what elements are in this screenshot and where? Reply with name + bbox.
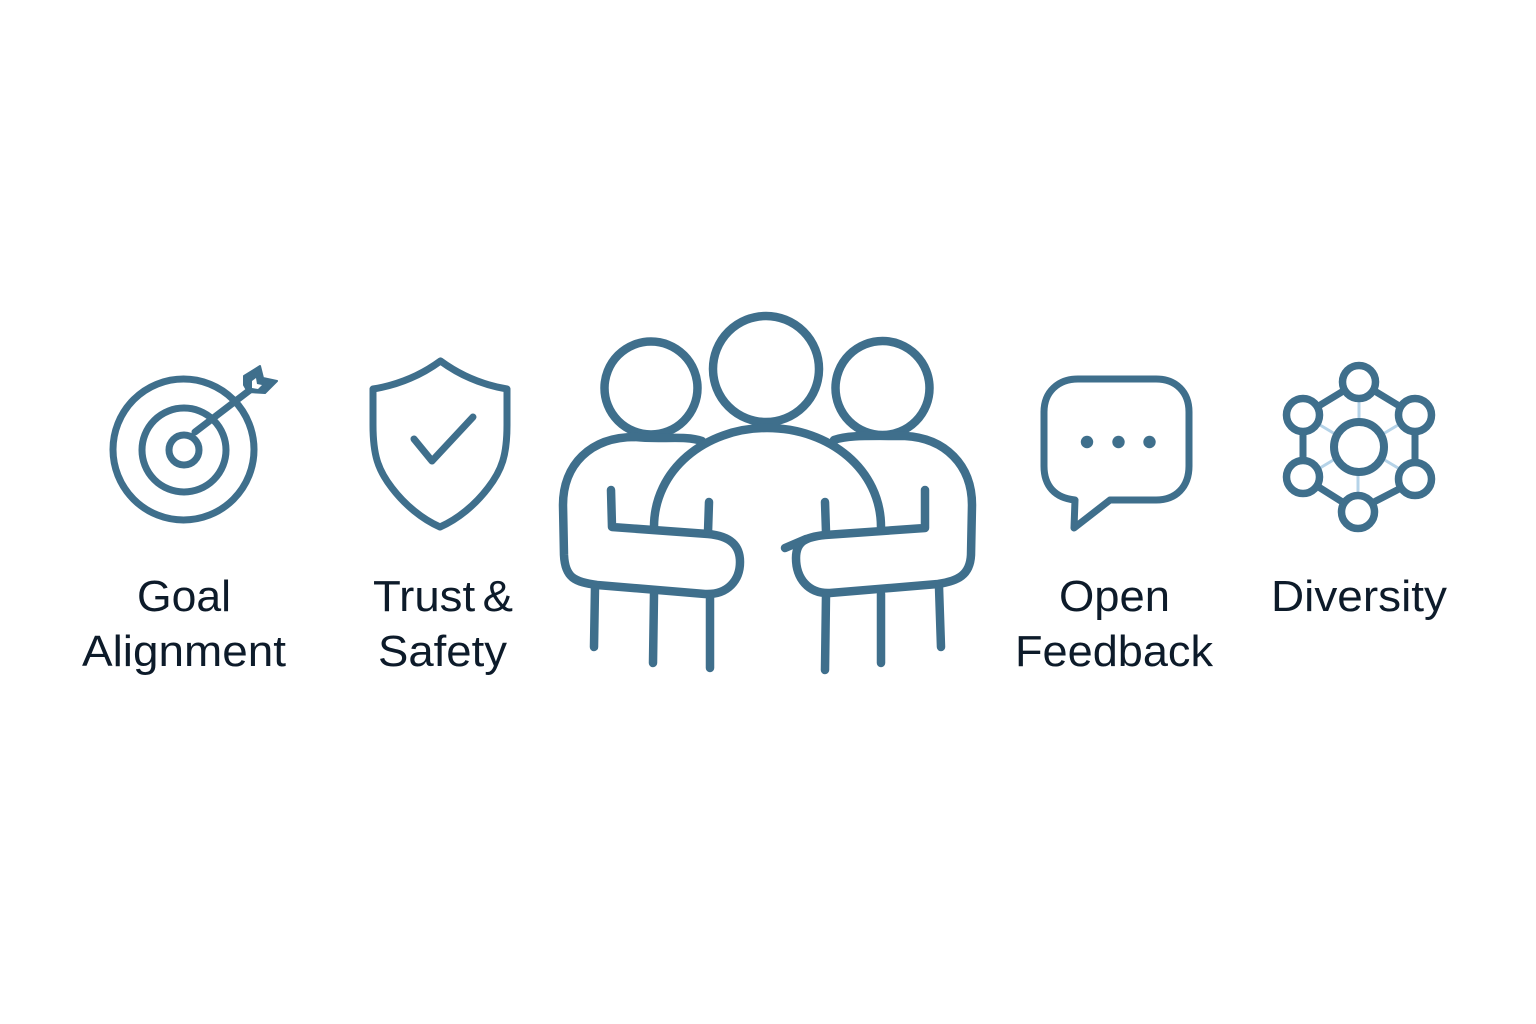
icon: network hexagon — [1286, 366, 1432, 528]
centre left hand — [708, 502, 709, 532]
centre right hand — [825, 502, 826, 532]
label: Diversity: Diversity — [1271, 572, 1447, 621]
nodes — [1286, 366, 1432, 528]
label: Goal Alignment: Goal — [137, 572, 231, 621]
label: Trust & Safety: Safety — [378, 627, 507, 676]
icon: target with arrow — [113, 366, 277, 520]
right body and arm — [796, 436, 972, 593]
centre body arc — [654, 428, 881, 527]
label: Goal Alignment: Alignment — [82, 627, 286, 676]
left body and arm — [563, 437, 740, 594]
label: Trust & Safety: Trust & — [373, 572, 513, 621]
icon: three people embracing — [563, 316, 972, 670]
right head — [836, 341, 930, 435]
label: Open Feedback — [1015, 572, 1214, 676]
label: Goal Alignment — [82, 572, 286, 676]
icon: speech bubble — [1044, 379, 1189, 528]
icon: shield with check — [373, 361, 507, 527]
right hand tip — [785, 539, 806, 548]
light spokes — [1320, 399, 1398, 494]
label: Trust & Safety — [373, 572, 513, 676]
outer links — [1303, 390, 1415, 503]
legs — [594, 587, 941, 670]
middle head — [713, 316, 819, 422]
label: Open Feedback: Feedback — [1015, 627, 1214, 676]
label: Open Feedback: Open — [1059, 572, 1170, 621]
left head — [604, 342, 698, 434]
